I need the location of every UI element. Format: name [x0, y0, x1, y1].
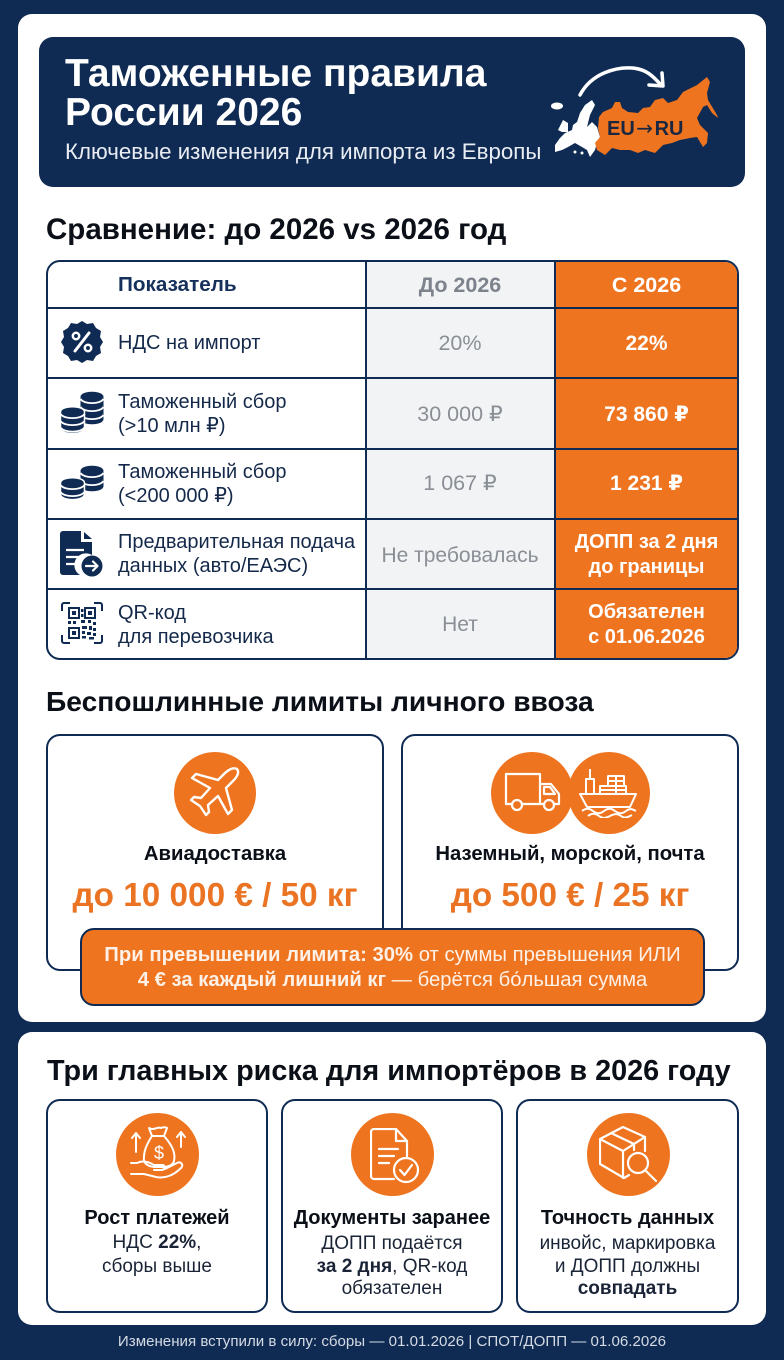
card text: НДС 22%, [113, 1232, 201, 1253]
comparison table [46, 260, 739, 660]
card value: до 10 000 € / 50 кг [73, 877, 357, 914]
row after: advance data: ДОПП за 2 дня [575, 530, 718, 552]
icon: EU to RU map [551, 66, 718, 157]
row label: customs fee over 10M: (>10 млн ₽) [118, 415, 226, 437]
heading: three risks: Три главных риска для импортёров в 2026 году [47, 1055, 731, 1087]
row before: QR code: Нет [442, 612, 478, 636]
card title: Точность данных [541, 1207, 714, 1229]
row label: customs fee under 200k [118, 461, 286, 507]
row after: VAT: 22% [625, 332, 668, 354]
row label: advance data submission: данных (авто/ЕАЭС) [118, 555, 308, 577]
row label: QR code [118, 602, 274, 648]
row before: VAT: 20% [438, 331, 482, 355]
column: from 2026 background [555, 262, 741, 658]
table header: indicator: Показатель [118, 273, 237, 296]
card text [540, 1233, 716, 1299]
subtitle: Ключевые изменения для импорта из Европы [65, 139, 541, 164]
card value: до 500 € / 25 кг [451, 877, 689, 914]
icon: money bag in hand: $ [154, 1143, 164, 1163]
column: before 2026 background [366, 262, 555, 658]
card text: и ДОПП должны [555, 1256, 700, 1276]
card: data accuracy [516, 1099, 739, 1313]
card text: обязателен [342, 1278, 442, 1299]
card: documents in advance [281, 1099, 503, 1313]
row label: QR code: для перевозчика [118, 626, 274, 648]
title: России 2026 [65, 90, 302, 134]
row label: customs fee over 10M [118, 391, 286, 437]
panel: main white panel [18, 14, 766, 1022]
icon: box with magnifier [587, 1113, 670, 1196]
icon: ship [568, 752, 650, 834]
row after: fee over 10M: 73 860 ₽ [604, 402, 689, 426]
row after: QR code [588, 600, 705, 648]
card text: сборы выше [102, 1256, 212, 1277]
row label: customs fee under 200k: Таможенный сбор [118, 461, 286, 483]
card title: Рост платежей [84, 1207, 230, 1229]
row after: QR code: с 01.06.2026 [588, 626, 705, 648]
card text: совпадать [578, 1278, 677, 1299]
heading: duty-free limits: Беспошлинные лимиты личного ввоза [46, 685, 594, 717]
title: Таможенные правила [65, 52, 486, 94]
icon: coins tall [61, 392, 104, 433]
card title: Документы заранее [294, 1207, 490, 1229]
card: air delivery [46, 734, 384, 971]
row after: advance data [574, 530, 718, 578]
card: land, sea, post [401, 734, 739, 971]
header banner [39, 37, 745, 187]
table header: from 2026: С 2026 [612, 273, 681, 297]
card: payments growth [46, 1099, 268, 1313]
icon: QR code [61, 602, 103, 644]
row label: customs fee over 10M: Таможенный сбор [118, 391, 286, 413]
row after: fee under 200k: 1 231 ₽ [610, 472, 683, 495]
card text: ДОПП подаётся [321, 1233, 463, 1254]
row label: advance data submission: Предварительная подача [118, 531, 355, 553]
card title: Авиадоставка [144, 843, 286, 865]
card title: Наземный, морской, почта [435, 843, 705, 865]
row before: fee under 200k: 1 067 ₽ [423, 471, 497, 495]
row label: customs fee under 200k: (<200 000 ₽) [118, 485, 234, 507]
row label: VAT: НДС на импорт [118, 332, 260, 354]
heading: comparison: Сравнение: до 2026 vs 2026 год [46, 213, 506, 246]
row before: advance data: Не требовалась [381, 544, 539, 566]
icon: money bag in hand [116, 1113, 199, 1196]
callout: over-limit rule: 4 € за каждый лишний кг — берётся бо́льшая сумма [138, 968, 647, 990]
icon: coins short [61, 466, 104, 499]
row after: QR code: Обязателен [588, 600, 705, 622]
footer note: Изменения вступили в силу: сборы — 01.01.2026 | СПОТ/ДОПП — 01.06.2026 [118, 1333, 666, 1350]
callout: over-limit rule: При превышении лимита: 30% от суммы превышения ИЛИ [104, 944, 681, 966]
row label: advance data submission [118, 531, 356, 577]
icon: plane [174, 752, 256, 834]
panel: risks white panel [18, 1032, 766, 1325]
row before: fee over 10M: 30 000 ₽ [417, 402, 503, 426]
card text [317, 1233, 467, 1299]
title [65, 52, 487, 134]
callout: over-limit rule [80, 928, 705, 1006]
card text [102, 1232, 212, 1277]
label: EU→RU: EU→RU [607, 116, 683, 140]
card text: инвойс, маркировка [540, 1233, 715, 1254]
icon: truck [491, 752, 573, 834]
icon: percent badge [61, 321, 103, 363]
icon: document with arrow [60, 531, 102, 576]
table header: before 2026: До 2026 [419, 273, 501, 297]
icon: document with check [351, 1113, 434, 1196]
row after: advance data: до границы [589, 556, 704, 578]
card text: за 2 дня, QR-код [317, 1256, 467, 1276]
row label: QR code: QR-код [118, 602, 186, 624]
